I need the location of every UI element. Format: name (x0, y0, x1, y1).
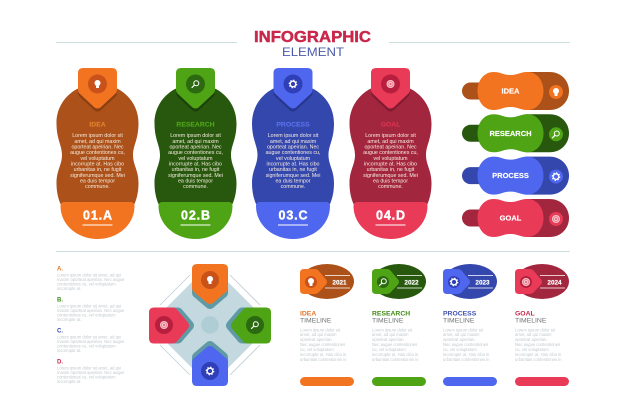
timeline: idea: IDEA (300, 310, 316, 318)
panel: idea card: amet, ad qui maxim (74, 139, 121, 145)
text list: A to D: B. (57, 298, 63, 304)
timeline: goal: cu, vel voluptatum (515, 347, 549, 352)
panel: research card: Lorem ipsum dolor sit (170, 133, 221, 139)
panel: process card: PROCESS (276, 121, 310, 128)
timeline: research: urbanitas contentiones in (372, 357, 419, 362)
timeline: goal: Lorem ipsum dolor sit (515, 328, 556, 332)
panel: idea card: augue contentiones cu, (70, 150, 125, 156)
timeline: idea: amet, ad qui maxim (300, 332, 337, 337)
panel: research card: signiferumque sed. Mei (168, 173, 223, 179)
timeline: process: PROCESS (443, 310, 477, 318)
timeline: research: 2022 (404, 279, 419, 286)
timeline: research: incorrupte at. Has cibo in (372, 352, 419, 357)
panel: idea card: incorrupte at. Has cibo (71, 162, 124, 168)
timeline: idea (300, 264, 354, 386)
panel: research card: amet, ad qui maxim (172, 139, 219, 145)
panel: goal card: amet, ad qui maxim (367, 139, 414, 145)
panel: process card: amet, ad qui maxim (270, 139, 317, 145)
diagram: diamond with four tabs (149, 264, 271, 386)
timeline: research: cu, vel voluptatum (372, 347, 406, 352)
panel: process card (252, 68, 334, 239)
timeline: goal: incorrupte at. Has cibo in (515, 352, 562, 357)
panel: process card: incorrupte at. Has cibo (266, 162, 320, 168)
panel: idea card: commune. (85, 184, 110, 190)
text list: A to D: Lorem ipsum dolor sit amet, ad qui (57, 334, 121, 340)
panel: idea card: ea duis tempor (80, 178, 115, 184)
timeline: research: oporteat apeirian. (372, 337, 405, 342)
timeline: goal: oporteat apeirian. (515, 337, 548, 342)
text list: A to D: Lorem ipsum dolor sit amet, ad qui (57, 304, 121, 308)
text list: A to D: D. (57, 360, 63, 366)
tab: red (149, 308, 194, 344)
title (254, 29, 371, 59)
timeline: process: amet, ad qui maxim (443, 332, 480, 337)
timeline: idea: Nec augue contentiones (300, 342, 345, 347)
panel: goal card: augue contentiones cu, (363, 150, 418, 156)
panel: idea card: Lorem ipsum dolor sit (72, 133, 123, 139)
panel: goal card: 04.D (376, 208, 405, 222)
panel: goal card: ea duis tempor (373, 178, 408, 184)
text list: A to D: maxim oporteat apeirian. Nec augue (57, 370, 125, 375)
timeline: process: incorrupte at. Has cibo in (443, 352, 490, 357)
panel: process card: vel voluptatum (276, 156, 311, 162)
timeline: process: Nec augue contentiones (443, 342, 488, 347)
timeline: idea: TIMELINE (300, 318, 332, 324)
pill: goal: GOAL (500, 214, 522, 222)
panel: process card: augue contentiones cu, (266, 150, 320, 156)
pill: idea: IDEA (502, 86, 520, 96)
panel: idea card (56, 68, 138, 239)
panel: research card: oporteat apeirian. Nec (169, 144, 222, 150)
timeline: idea: Lorem ipsum dolor sit (300, 328, 341, 332)
panel: research card: incorrupte at. Has cibo (169, 162, 222, 168)
panel: process card: commune. (281, 184, 305, 190)
text list: A to D: Lorem ipsum dolor sit amet, ad qui (57, 366, 121, 370)
text list: A to D: contentiones cu, vel voluptatum (57, 344, 116, 348)
panel: idea card: signiferumque sed. Mei (70, 173, 125, 179)
panel: goal card: commune. (378, 184, 403, 190)
timeline: goal: 2024 (547, 279, 562, 286)
timeline: research (372, 264, 426, 386)
panel: idea card: IDEA (89, 121, 106, 128)
text list: A to D: A. (57, 266, 63, 272)
timeline: goal: amet, ad qui maxim (515, 332, 552, 337)
panel: goal card: GOAL (381, 121, 400, 128)
pill: research (462, 114, 569, 152)
timeline: idea: incorrupte at. Has cibo in (300, 352, 347, 357)
timeline: research: TIMELINE (372, 318, 404, 324)
panel: goal card: oporteat apeirian. Nec (364, 144, 417, 150)
pill: goal (462, 199, 569, 237)
timeline: process: Lorem ipsum dolor sit (443, 328, 484, 332)
text list: A to D: C. (57, 328, 63, 334)
panel: research card: 02.B (181, 208, 210, 222)
panel: research card: vel voluptatum (178, 156, 213, 162)
pill: process (462, 157, 569, 195)
panel: research card (154, 68, 236, 239)
timeline: goal: Nec augue contentiones (515, 342, 560, 347)
text list: A to D: maxim oporteat apeirian. Nec augue (57, 277, 125, 282)
tab: orange (192, 264, 228, 309)
timeline: idea: cu, vel voluptatum (300, 347, 334, 352)
timeline: process: oporteat apeirian. (443, 337, 476, 342)
panel: goal card: vel voluptatum (373, 156, 408, 162)
pill: idea (462, 72, 569, 110)
timeline: goal: TIMELINE (515, 318, 547, 324)
tab: green (226, 308, 271, 344)
panel: goal card: incorrupte at. Has cibo (364, 162, 417, 168)
panel: process card: 03.C (278, 208, 308, 222)
timeline: idea: urbanitas contentiones in (300, 357, 347, 362)
text list: A to D: incorrupte at. (57, 379, 81, 384)
timeline: idea: oporteat apeirian. (300, 337, 333, 342)
tab: blue (192, 341, 228, 386)
timeline: goal: GOAL (515, 310, 535, 318)
text list: A to D: maxim oporteat apeirian. Nec augue (57, 339, 125, 344)
panel: idea card: oporteat apeirian. Nec (71, 144, 124, 150)
title: ELEMENT (282, 45, 345, 59)
panel: goal card: signiferumque sed. Mei (363, 173, 418, 179)
text list: A to D: incorrupte at. (57, 286, 81, 291)
panel: goal card: urbanitas in, ne fugit (367, 167, 415, 173)
timeline: research: Nec augue contentiones (372, 342, 417, 347)
text list: A to D: contentiones cu, vel voluptatum (57, 282, 116, 286)
text list: A to D: contentiones cu, vel voluptatum (57, 312, 116, 318)
timeline: goal (515, 264, 569, 386)
text list: A to D: maxim oporteat apeirian. Nec augue (57, 308, 125, 313)
title: INFOGRAPHIC (254, 29, 371, 46)
timeline: goal: urbanitas contentiones in (515, 357, 562, 362)
timeline: research: RESEARCH (372, 310, 410, 318)
timeline: process: 2023 (475, 279, 490, 286)
timeline: idea: 2021 (332, 279, 347, 286)
timeline: research: Lorem ipsum dolor sit (372, 328, 413, 332)
pill: process: PROCESS (492, 171, 529, 180)
panel: process card: signiferumque sed. Mei (266, 173, 320, 179)
timeline: process: urbanitas contentiones in (443, 357, 490, 362)
panel: research card: ea duis tempor (178, 178, 213, 184)
panel: process card: oporteat apeirian. Nec (267, 144, 319, 150)
text list: A to D: Lorem ipsum dolor sit amet, ad qui (57, 272, 121, 278)
timeline: process: cu, vel voluptatum (443, 347, 477, 352)
timeline: process: TIMELINE (443, 318, 475, 324)
panel: idea card: vel voluptatum (80, 156, 115, 162)
panel: research card: RESEARCH (176, 121, 215, 128)
text list: A to D: incorrupte at. (57, 348, 81, 353)
panel: goal card: Lorem ipsum dolor sit (365, 133, 416, 139)
panel: process card: ea duis tempor (275, 178, 311, 184)
panel: idea card: 01.A (83, 208, 112, 222)
panel: process card: urbanitas in, ne fugit (269, 167, 317, 173)
panel: process card: Lorem ipsum dolor sit (268, 133, 319, 139)
panel: research card: urbanitas in, ne fugit (172, 167, 220, 173)
panel: goal card (350, 68, 432, 239)
panel: idea card: urbanitas in, ne fugit (74, 167, 122, 173)
text list: A to D: contentiones cu, vel voluptatum (57, 374, 116, 380)
panel: research card: commune. (183, 184, 208, 190)
pill: research: RESEARCH (489, 129, 532, 138)
timeline: process (443, 264, 497, 386)
timeline: research: amet, ad qui maxim (372, 332, 409, 337)
panel: research card: augue contentiones cu, (168, 150, 223, 156)
text list: A to D (57, 266, 125, 384)
text list: A to D: incorrupte at. (57, 317, 81, 322)
